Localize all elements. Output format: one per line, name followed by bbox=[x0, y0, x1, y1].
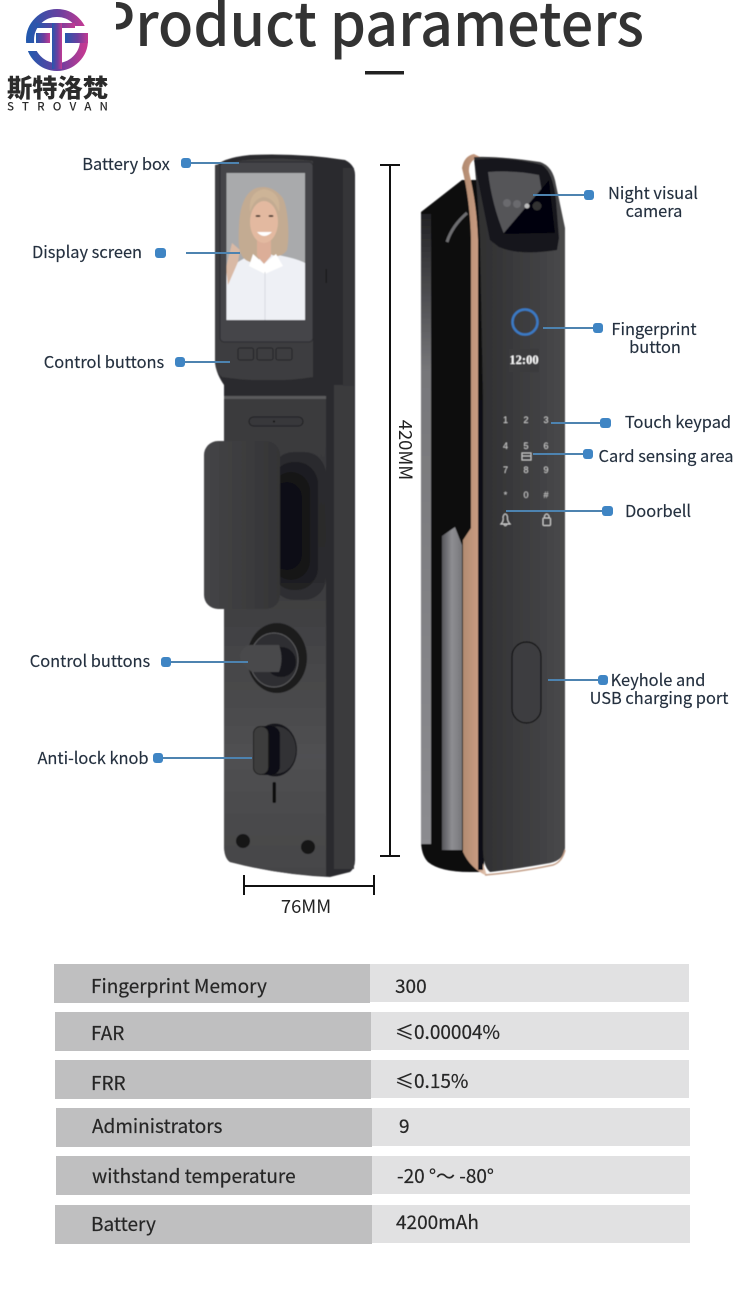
callouts left: Control buttons bbox=[44, 349, 165, 373]
keypad: 2 bbox=[523, 415, 529, 425]
copper edge bbox=[462, 154, 487, 876]
screw holes bbox=[236, 834, 315, 854]
row: battery: Battery bbox=[91, 1210, 156, 1237]
row: battery bbox=[55, 1205, 690, 1244]
row: withstand temperature: -20 °～ -80° bbox=[397, 1162, 494, 1189]
dimension: width label: 76MM bbox=[281, 893, 331, 919]
row: administrators: 9 bbox=[399, 1112, 410, 1139]
row: administrators bbox=[56, 1108, 690, 1147]
back lock face plate bbox=[224, 396, 326, 876]
keypad: 6 bbox=[543, 441, 549, 451]
row: fingerprint memory: 300 bbox=[395, 972, 427, 999]
back lock head bbox=[215, 159, 313, 380]
row: FAR bbox=[55, 1012, 689, 1051]
row: FAR: FAR bbox=[91, 1019, 124, 1046]
keypad: 9 bbox=[543, 465, 549, 475]
handle bbox=[204, 441, 280, 609]
label: night visual camera: Night visual bbox=[608, 180, 698, 204]
keyhole cover bbox=[512, 642, 541, 723]
row: FRR: FRR bbox=[91, 1069, 126, 1096]
back lock body bbox=[215, 155, 355, 877]
keypad bbox=[503, 415, 549, 500]
callouts right bbox=[506, 180, 734, 709]
keypad: 7 bbox=[503, 465, 508, 475]
product: back view lock bbox=[204, 155, 355, 877]
spec table bbox=[54, 964, 690, 1244]
keypad: 4 bbox=[503, 441, 508, 451]
row: battery: 4200mAh bbox=[396, 1208, 479, 1235]
anti-lock knob bbox=[253, 724, 297, 776]
speaker slot bbox=[249, 417, 303, 426]
clock display bbox=[509, 349, 539, 372]
cylinder knob bbox=[240, 623, 307, 693]
row: withstand temperature: withstand temperature bbox=[92, 1162, 296, 1189]
clock display: 12:00 bbox=[509, 353, 539, 367]
callouts left: Control buttons bbox=[30, 648, 151, 672]
row: administrators: Administrators bbox=[92, 1112, 223, 1139]
dimension: height bbox=[380, 165, 400, 856]
row: withstand temperature bbox=[56, 1156, 690, 1195]
row: FAR: ≤0.00004% bbox=[395, 1018, 500, 1045]
callouts right: Touch keypad bbox=[625, 409, 731, 433]
side body bbox=[421, 180, 484, 872]
callouts right: Doorbell bbox=[625, 498, 691, 522]
callouts right: camera bbox=[626, 198, 682, 222]
bell icon bbox=[501, 514, 510, 526]
camera glass bbox=[488, 171, 548, 234]
head buttons bbox=[238, 348, 292, 360]
front face bbox=[474, 157, 565, 872]
keypad: 1 bbox=[503, 415, 508, 425]
keypad: * bbox=[504, 490, 508, 500]
callouts left bbox=[30, 151, 252, 769]
keypad: 8 bbox=[523, 465, 529, 475]
row: FRR bbox=[55, 1060, 689, 1099]
dimension: height label: 420MM bbox=[393, 420, 419, 480]
logo bbox=[7, 13, 108, 114]
keypad: 5 bbox=[523, 441, 529, 451]
callouts right: Fingerprint bbox=[611, 316, 697, 340]
label: battery box: Battery box bbox=[82, 151, 170, 175]
product: front view lock bbox=[421, 154, 565, 876]
callouts left: Anti-lock knob bbox=[37, 745, 149, 769]
callouts right: Card sensing area bbox=[598, 443, 734, 467]
title underline bbox=[365, 71, 404, 74]
camera recess bbox=[474, 159, 559, 252]
padlock icon bbox=[543, 514, 550, 526]
logo: STROVAN bbox=[7, 98, 108, 114]
logo: 斯特洛梵 bbox=[7, 69, 108, 105]
dimension: width bbox=[244, 875, 374, 895]
screen bezel bbox=[220, 162, 313, 342]
speaker dots bbox=[326, 269, 327, 283]
handle shadow bbox=[272, 452, 326, 600]
keypad: 0 bbox=[523, 490, 529, 500]
row: FRR: ≤0.15% bbox=[395, 1067, 468, 1094]
row: fingerprint memory: Fingerprint Memory bbox=[91, 972, 267, 999]
callouts right: button bbox=[629, 334, 681, 358]
screen with portrait bbox=[226, 173, 306, 320]
callouts right: Keyhole and bbox=[611, 667, 705, 691]
row: fingerprint memory bbox=[54, 964, 689, 1003]
callouts left: Display screen bbox=[32, 239, 142, 263]
keypad: # bbox=[543, 490, 549, 500]
card icon bbox=[522, 453, 531, 460]
fingerprint ring bbox=[512, 310, 538, 334]
keypad: 3 bbox=[543, 415, 549, 425]
callouts right: USB charging port bbox=[590, 685, 728, 709]
